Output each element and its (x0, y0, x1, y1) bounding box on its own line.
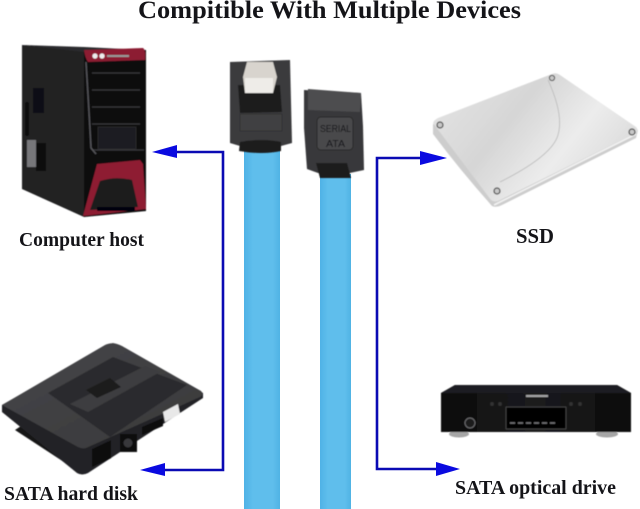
connector: straight SERIAL ATA plug: SERIAL (320, 124, 351, 135)
connector: straight SERIAL ATA plug: ATA (326, 139, 345, 150)
cable: right blue ribbon (320, 174, 351, 509)
arrow: to SSD (377, 151, 447, 313)
icon: SSD (433, 73, 638, 207)
icon: computer tower (22, 45, 146, 217)
arrow: to SATA hard disk (140, 311, 223, 476)
label: SSD: SSD (516, 224, 554, 248)
label: computer host: Computer host (19, 230, 144, 251)
label: SATA hard disk: SATA hard disk (4, 483, 139, 505)
arrow: to SATA optical drive (377, 313, 460, 476)
icon: optical drive player (441, 385, 631, 438)
arrow: to computer host (152, 145, 223, 311)
icon: SATA hard disk adapter (2, 343, 203, 474)
connector: right-angle latching plug (230, 60, 292, 153)
connector: straight SERIAL ATA plug (304, 89, 364, 178)
cable: left blue ribbon (244, 144, 280, 509)
label: SATA optical drive: SATA optical drive (455, 477, 616, 499)
